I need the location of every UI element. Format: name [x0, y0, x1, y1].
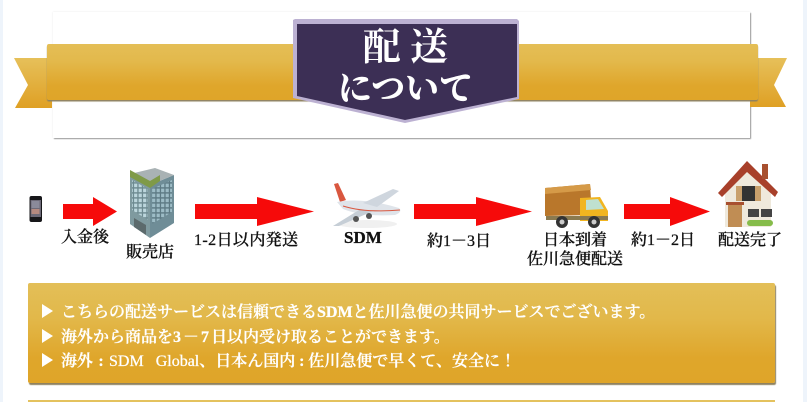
icon: house [718, 161, 778, 227]
title text: について [338, 71, 473, 108]
next panel top edge [28, 400, 775, 402]
arrow: 1-3 days [414, 197, 532, 226]
info panel [28, 283, 775, 383]
icon: smartphone [30, 196, 42, 222]
bullet line 1: こちらの配送サービスは信頼できるSDMと佐川急便の共同サービスでございます。 [61, 304, 655, 321]
label: ship within 2 days: 1-2日以内発送 [194, 232, 299, 249]
title text [338, 27, 473, 108]
process flow [30, 161, 782, 268]
bullet line 3: 海外 SDM Global、日本ん国内 佐川急便で早くて、安全に！ [61, 353, 516, 370]
banner white card [53, 12, 750, 138]
label: arrival and Sagawa delivery: 佐川急便配送 [527, 251, 623, 268]
label: 1-2 days: 約1－2日 [631, 232, 695, 249]
gold ribbon [47, 44, 758, 100]
left ribbon tail [14, 58, 52, 108]
title text: 配 送 [363, 27, 448, 69]
icon: airplane [333, 183, 400, 228]
bullet line 3: : [98, 353, 104, 370]
arrow: ship within 2 days [195, 197, 314, 226]
label: arrival and Sagawa delivery [527, 231, 623, 268]
title plaque [293, 19, 519, 123]
icon: office building [130, 168, 174, 238]
title banner [14, 12, 787, 140]
label: seller: 販売店 [126, 244, 174, 261]
label: payment: 入金後 [61, 229, 109, 246]
icon: delivery truck [545, 184, 608, 228]
label: arrival and Sagawa delivery: 日本到着 [543, 232, 607, 249]
bullet line 2: 海外から商品を3－7日以内受け取ることができます。 [61, 329, 450, 346]
label: delivered: 配送完了 [718, 232, 782, 249]
label: 1-3 days: 約1－3日 [427, 233, 491, 250]
label: SDM: SDM [344, 228, 382, 247]
arrow: 1-2 days [624, 197, 710, 226]
bullet line 3: : [299, 353, 304, 370]
arrow: payment [63, 197, 117, 226]
right ribbon tail [750, 58, 787, 107]
